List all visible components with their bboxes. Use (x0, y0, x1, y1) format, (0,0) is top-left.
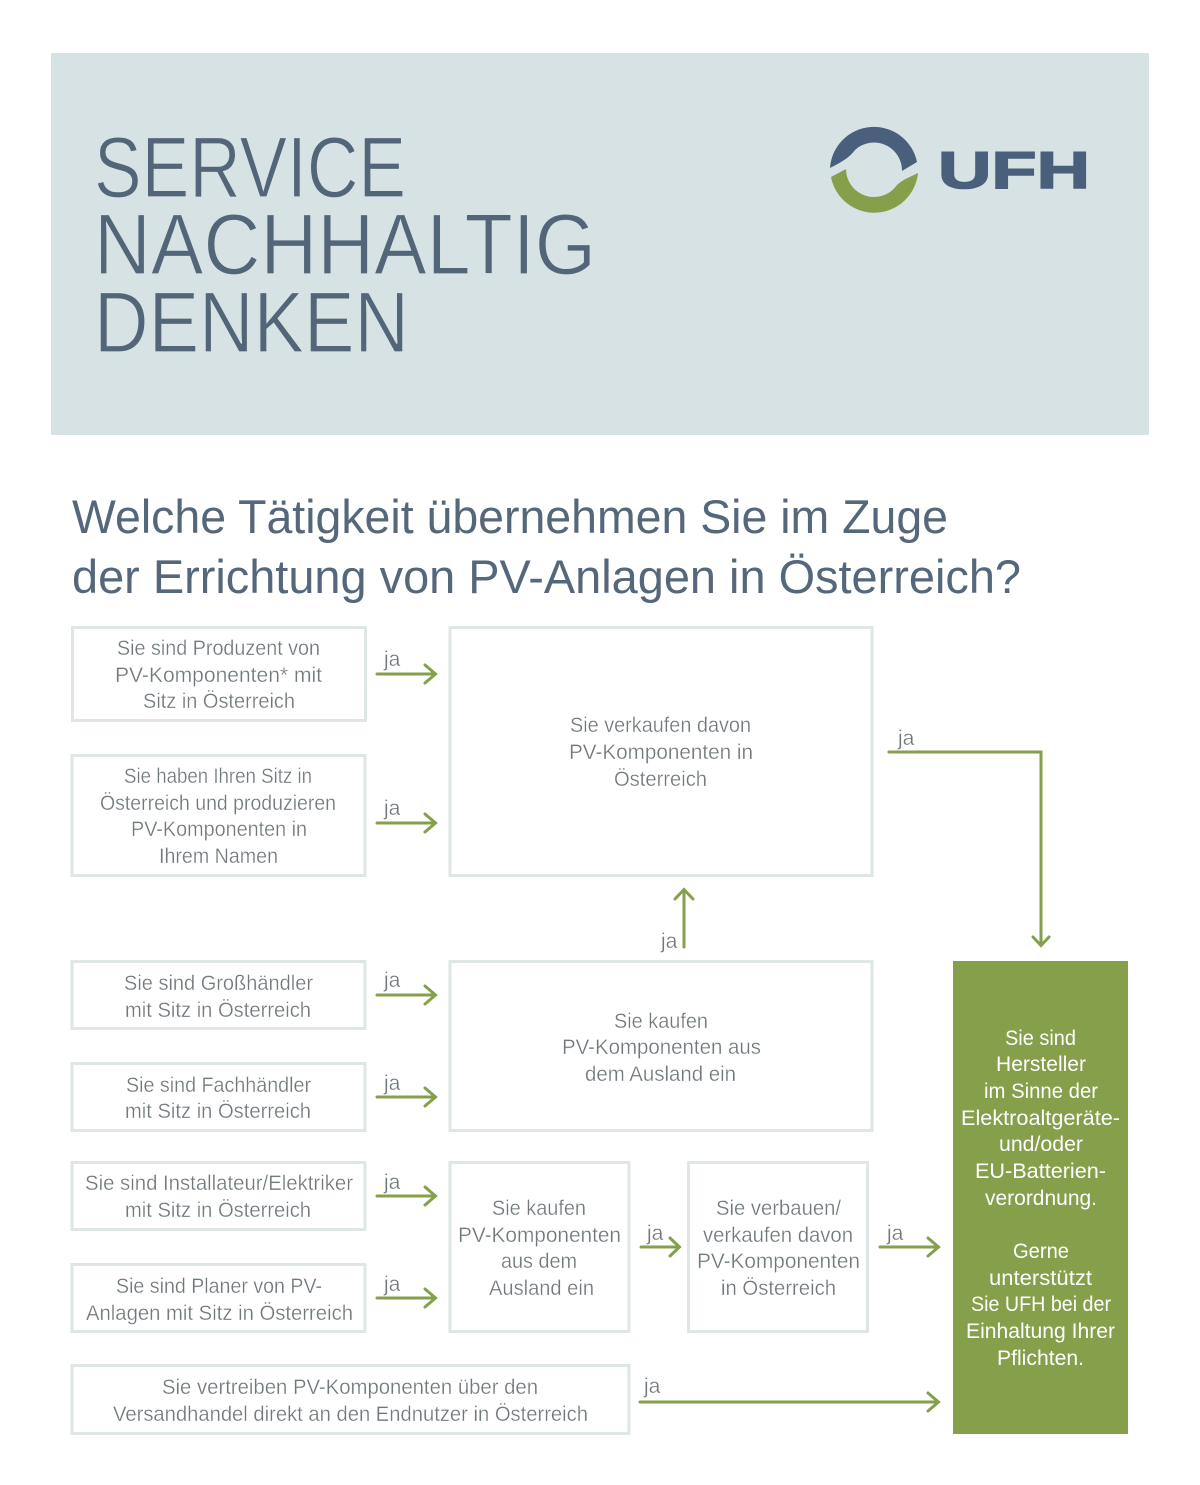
box: verkaufen davon: Sie verkaufen davon (570, 713, 751, 737)
panel: result: Hersteller (996, 1052, 1086, 1076)
box: Großhändler: mit Sitz in Österreich (125, 998, 311, 1022)
box: verkaufen davon (450, 628, 872, 876)
heading: question (72, 490, 1021, 603)
logo: UFH (830, 127, 1090, 213)
box: Produzent (72, 628, 366, 720)
arrow: verkaufen to result (889, 727, 1049, 946)
box: Versandhandel: Sie vertreiben PV-Komponenten über den (162, 1375, 538, 1399)
arrow: kaufen up to verkaufen (660, 890, 693, 953)
box: kaufen aus dem Ausland: dem Ausland ein (585, 1062, 736, 1086)
box: Großhändler: Sie sind Großhändler (124, 971, 313, 995)
box: Sitz in Österreich und produzieren (72, 756, 365, 876)
arrow: Großhändler: ja (383, 969, 401, 992)
panel: result: Pflichten. (997, 1346, 1084, 1370)
box: verkaufen davon: Österreich (614, 767, 707, 791)
arrow: Fachhändler (377, 1072, 436, 1106)
panel: result: im Sinne der (984, 1079, 1098, 1103)
box: Sitz in Österreich und produzieren: Österreich und produzieren (100, 791, 336, 815)
heading: question: Welche Tätigkeit übernehmen Sie im Zuge (72, 490, 948, 543)
box: Versandhandel: Versandhandel direkt an den Endnutzer in Österreich (113, 1402, 588, 1426)
panel: result: Einhaltung Ihrer (966, 1319, 1115, 1343)
box: Großhändler (72, 962, 365, 1028)
box: Installateur: Sie sind Installateur/Elektriker (85, 1171, 353, 1195)
box: Fachhändler: Sie sind Fachhändler (126, 1073, 311, 1097)
box: Planer (72, 1264, 365, 1332)
box: verbauen: verkaufen davon (703, 1223, 853, 1247)
arrow: Installateur: ja (383, 1171, 401, 1194)
panel: header (51, 53, 1149, 435)
panel: result: EU-Batterien- (975, 1159, 1106, 1183)
panel: result: Sie UFH bei der (971, 1292, 1111, 1316)
box: Installateur (72, 1162, 365, 1230)
arrow: kaufen to verbauen (641, 1222, 680, 1256)
box: Installateur: mit Sitz in Österreich (125, 1198, 311, 1222)
arrow: verkaufen to result: ja (897, 727, 915, 750)
panel: result: Gerne (1013, 1239, 1069, 1263)
title: DENKEN (94, 275, 409, 371)
title: SERVICE (94, 120, 406, 216)
box: Produzent: PV-Komponenten* mit (115, 663, 322, 687)
box: Sitz in Österreich und produzieren: PV-Komponenten in (131, 817, 307, 841)
title: NACHHALTIG (94, 197, 596, 293)
box: verbauen: PV-Komponenten (697, 1249, 860, 1273)
box: kaufen aus dem Ausland, klein: Ausland ein (489, 1276, 594, 1300)
arrow: Planer (377, 1273, 436, 1307)
arrow: Sitz und produzieren: ja (383, 797, 401, 820)
arrow: Großhändler (377, 969, 436, 1004)
box: Produzent: Sitz in Österreich (143, 689, 295, 713)
box: Fachhändler (72, 1064, 365, 1130)
heading: question: der Errichtung von PV-Anlagen in Österreich? (72, 550, 1021, 603)
arrow: kaufen up to verkaufen: ja (660, 930, 678, 953)
arrow: verbauen to result (880, 1222, 938, 1256)
box: Versandhandel (72, 1366, 629, 1434)
arrow: verbauen to result: ja (886, 1222, 904, 1245)
arrow: kaufen to verbauen: ja (646, 1222, 664, 1245)
panel: result: verordnung. (985, 1186, 1097, 1210)
box: Sitz in Österreich und produzieren: Sie haben Ihren Sitz in (124, 764, 312, 788)
panel: result (953, 961, 1128, 1434)
box: Sitz in Österreich und produzieren: Ihrem Namen (159, 844, 278, 868)
arrow: Fachhändler: ja (383, 1072, 401, 1095)
box: verkaufen davon: PV-Komponenten in (569, 740, 753, 764)
panel: result: und/oder (999, 1132, 1083, 1156)
box: Planer: Anlagen mit Sitz in Österreich (86, 1301, 353, 1325)
box: verbauen (688, 1162, 868, 1332)
arrow: Versandhandel to result (640, 1375, 938, 1411)
arrow: Produzent: ja (383, 648, 401, 671)
box: kaufen aus dem Ausland, klein (450, 1162, 629, 1332)
arrow: Produzent (377, 648, 436, 683)
panel: result: Sie sind (1005, 1026, 1076, 1050)
box: kaufen aus dem Ausland, klein: PV-Komponenten (458, 1223, 621, 1247)
box: kaufen aus dem Ausland: Sie kaufen (614, 1009, 708, 1033)
arrow: Versandhandel to result: ja (643, 1375, 661, 1398)
box: kaufen aus dem Ausland: PV-Komponenten aus (562, 1035, 761, 1059)
panel: result: unterstützt (989, 1266, 1092, 1290)
arrow: Installateur (377, 1171, 436, 1205)
box: Planer: Sie sind Planer von PV- (116, 1274, 322, 1298)
logo: UFH: UFH (938, 142, 1090, 200)
box: Fachhändler: mit Sitz in Österreich (125, 1099, 311, 1123)
box: Produzent: Sie sind Produzent von (117, 636, 320, 660)
box: verbauen: Sie verbauen/ (716, 1196, 841, 1220)
panel: result: Elektroaltgeräte- (961, 1106, 1120, 1130)
title (94, 120, 596, 371)
box: kaufen aus dem Ausland (450, 962, 872, 1130)
box: kaufen aus dem Ausland, klein: Sie kaufen (492, 1196, 586, 1220)
arrow: Sitz und produzieren (377, 797, 436, 832)
arrow: Planer: ja (383, 1273, 401, 1296)
box: kaufen aus dem Ausland, klein: aus dem (501, 1249, 577, 1273)
box: verbauen: in Österreich (721, 1276, 836, 1300)
